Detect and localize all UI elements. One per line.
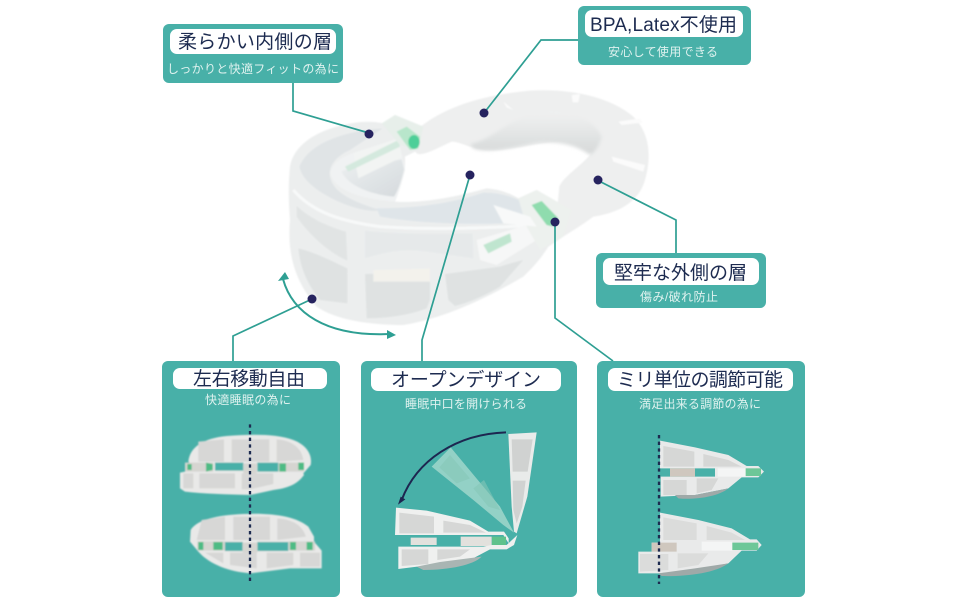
panel: open design: オープンデザイン xyxy=(391,369,541,391)
panel: millimetre adjustment xyxy=(597,361,805,597)
callout: BPA latex free xyxy=(578,6,751,65)
panel: open design xyxy=(361,361,577,597)
callout: soft inner layer: 柔らかい内側の層 xyxy=(178,31,332,53)
ghost position xyxy=(432,447,514,533)
illustration: opening mouthpiece xyxy=(395,432,537,570)
callout: strong outer layer: 堅牢な外側の層 xyxy=(614,262,747,284)
strap right xyxy=(477,225,537,265)
panel: millimetre adjustment: 満足出来る調節の為に xyxy=(639,397,761,411)
leader line: mm adjustment xyxy=(555,222,613,361)
panel: open design: 睡眠中口を開けられる xyxy=(405,396,527,411)
front body silhouette xyxy=(289,115,572,325)
panel: free movement: 快適睡眠の為に xyxy=(205,393,291,407)
callout: BPA latex free: 安心して使用できる xyxy=(608,44,718,59)
leader line: open design xyxy=(422,175,470,361)
panel: millimetre adjustment: ミリ単位の調節可能 xyxy=(617,369,783,391)
centre post xyxy=(373,268,430,282)
front channel xyxy=(377,193,533,224)
callout: soft inner layer xyxy=(163,24,343,83)
rim highlight xyxy=(293,190,537,228)
front connector xyxy=(518,190,572,250)
leader line: free movement xyxy=(233,299,312,361)
leader line: BPA free xyxy=(484,40,578,113)
callout: strong outer layer: 傷み/破れ防止 xyxy=(640,289,718,304)
centre line xyxy=(246,424,253,584)
centre line xyxy=(655,435,662,584)
illustration: shifted device views xyxy=(180,424,322,584)
top connector xyxy=(382,115,423,150)
callout: strong outer layer xyxy=(596,253,766,308)
inner recess xyxy=(470,112,602,155)
panel: free movement: 左右移動自由 xyxy=(193,368,305,390)
white marks xyxy=(503,94,645,172)
arc arrow xyxy=(398,432,506,505)
panel: free movement xyxy=(162,361,340,597)
illustration: mouthpiece device xyxy=(289,90,649,325)
closed upper jaw xyxy=(395,508,509,543)
callout: BPA latex free: BPA,Latex不使用 xyxy=(590,14,737,36)
callout: soft inner layer: しっかりと快適フィットの為に xyxy=(167,62,339,76)
upper tray front windows xyxy=(365,231,473,258)
back loop outer layer xyxy=(403,90,649,247)
view: neutral xyxy=(660,441,764,499)
arrow: left and right movement xyxy=(278,272,396,339)
bottom view xyxy=(190,514,322,573)
inner cup xyxy=(330,138,405,202)
illustration: side adjustment views xyxy=(638,435,764,584)
marker dots xyxy=(308,108,602,304)
tray interior shade xyxy=(299,128,383,211)
raised jaw xyxy=(508,432,537,533)
inner strap xyxy=(353,138,402,178)
leader line: outer layer xyxy=(597,180,676,253)
leader line: inner layer xyxy=(293,83,369,133)
top view xyxy=(180,435,311,495)
lower jaw xyxy=(411,537,492,546)
view: extended xyxy=(638,513,762,576)
lower tray windows xyxy=(298,248,523,318)
